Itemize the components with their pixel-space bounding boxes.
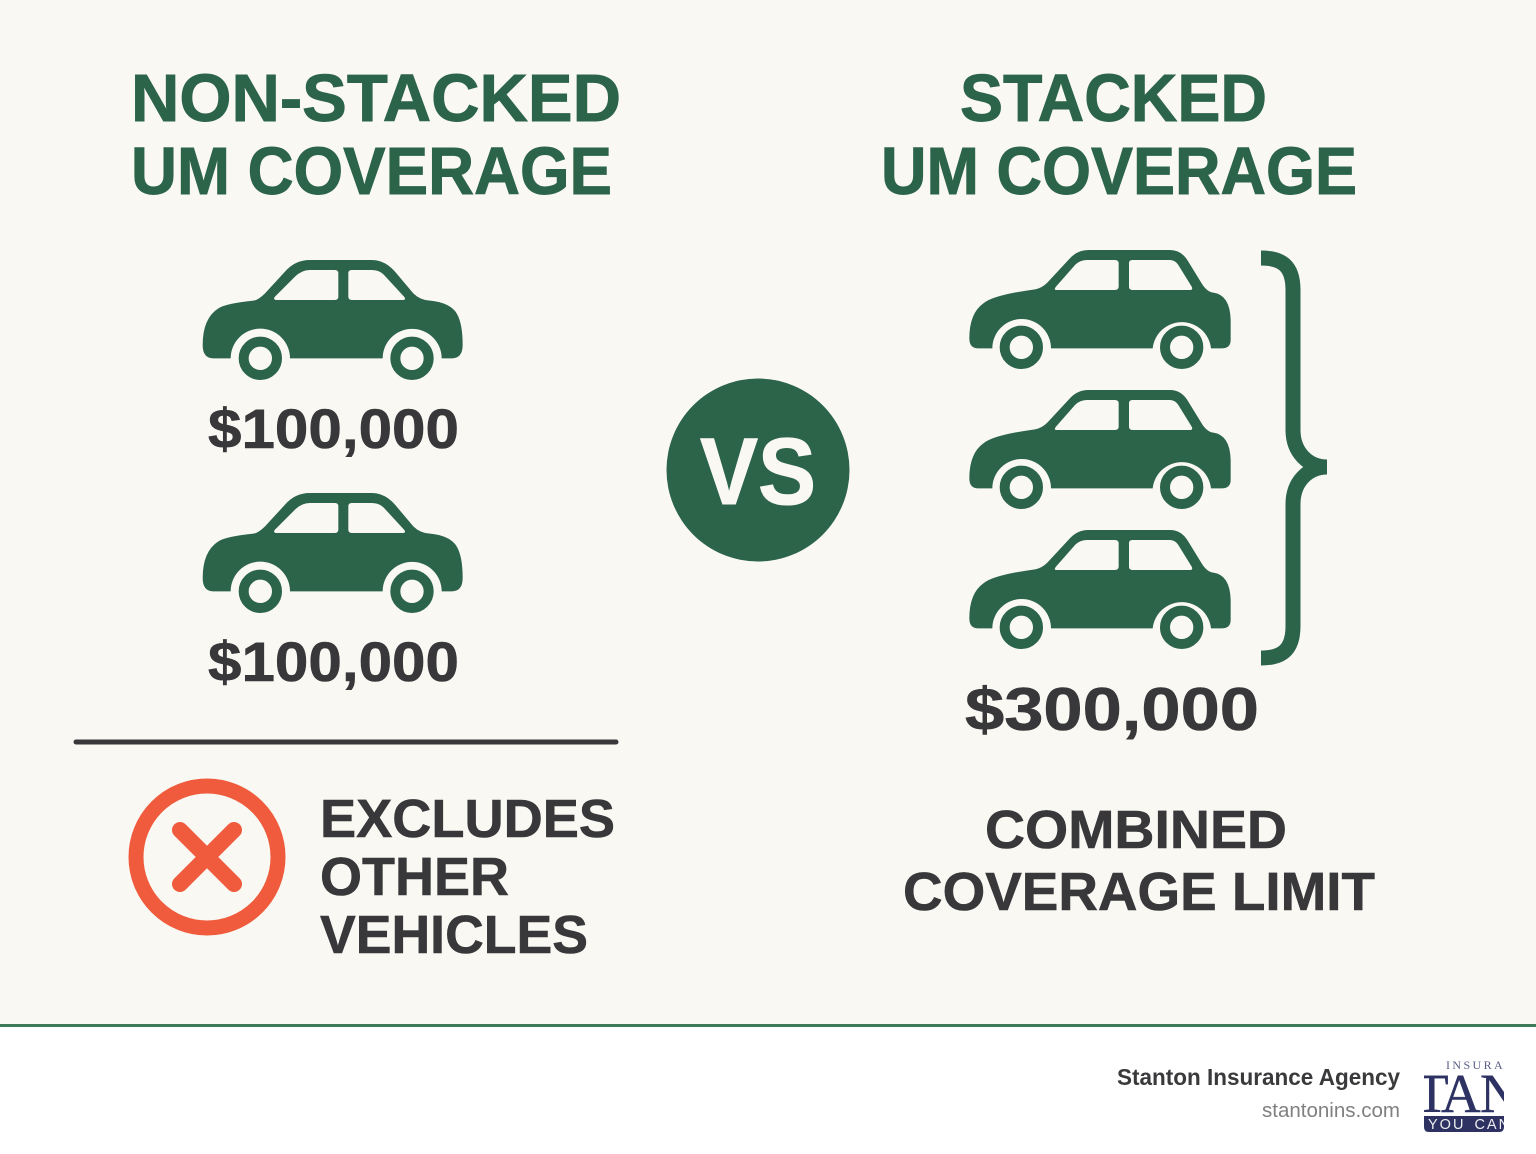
text: excludes other vehicles (320, 789, 615, 965)
footer: agency logo: TAN (1415, 1063, 1520, 1124)
value: stacked total $300,000: $300,000 (965, 676, 1259, 743)
heading: non-stacked UM coverage: NON-STACKED (131, 61, 621, 136)
text: excludes other vehicles: VEHICLES (320, 905, 588, 965)
icon: red X in circle (136, 786, 278, 928)
icon: stacked car 3 (969, 530, 1231, 644)
heading: non-stacked UM coverage: UM COVERAGE (131, 134, 612, 209)
VS badge: VS (700, 419, 816, 525)
text: excludes other vehicles: OTHER (320, 847, 509, 907)
footer: agency logo: YOU CAN (1428, 1117, 1511, 1133)
icon: stacked car 2 (969, 390, 1231, 504)
heading: stacked UM coverage (881, 61, 1357, 209)
value: first car $100,000: $100,000 (208, 397, 459, 460)
heading: non-stacked UM coverage (131, 61, 621, 209)
footer: agency logo (1424, 1062, 1504, 1132)
VS badge (666, 378, 850, 562)
footer: website: stantonins.com (1262, 1100, 1400, 1122)
text: combined coverage limit (903, 800, 1375, 922)
icon: non-stacked car 2 (203, 493, 463, 608)
icon: curly brace grouping stacked cars (1261, 258, 1327, 658)
value: second car $100,000: $100,000 (208, 630, 459, 693)
text: excludes other vehicles: EXCLUDES (320, 789, 615, 849)
footer panel (0, 1024, 1536, 1154)
heading: stacked UM coverage: UM COVERAGE (881, 134, 1357, 209)
text: combined coverage limit: COMBINED (985, 800, 1287, 860)
text: combined coverage limit: COVERAGE LIMIT (903, 862, 1375, 922)
divider line under non-stacked cars (76, 740, 616, 744)
icon: stacked car 1 (969, 250, 1231, 364)
footer: agency logo: INSURANCE (1446, 1058, 1536, 1072)
footer: agency name: Stanton Insurance Agency (1117, 1064, 1400, 1090)
icon: non-stacked car 1 (203, 260, 463, 375)
heading: stacked UM coverage: STACKED (960, 61, 1267, 136)
